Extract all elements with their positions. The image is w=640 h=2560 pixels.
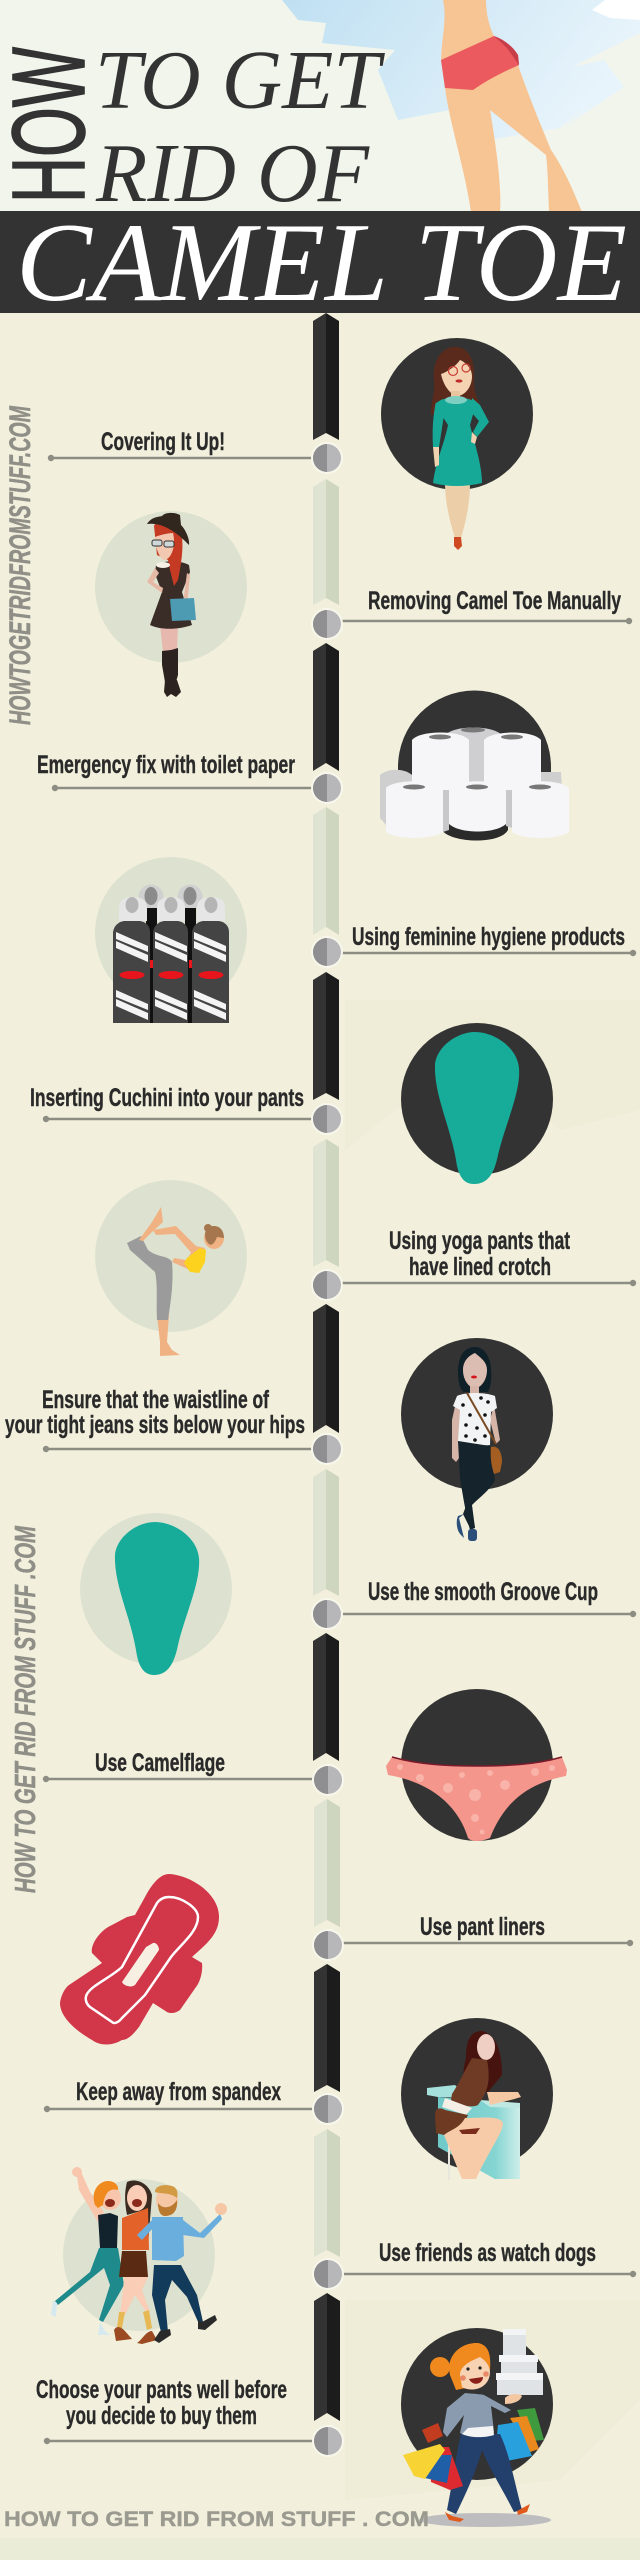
boxes stack [496,2329,543,2395]
friend: middle woman [114,2181,157,2344]
header panel [0,0,640,212]
icon: red sanitary pad [60,1874,219,2044]
title band: CAMEL TOE: CAMEL TOE [16,201,627,325]
icon: woman in polka-dot shirt [401,1338,553,1541]
icon: toilet paper rolls [380,690,569,841]
labels [5,428,625,2430]
label 5: Inserting Cuchini into your pants [30,1084,304,1112]
bags right [497,2408,544,2461]
head and hair [430,2343,490,2390]
friend: left woman [51,2167,124,2335]
cardigan [443,2393,511,2437]
label 6 [389,1227,570,1281]
label 11: Keep away from spandex [76,2078,281,2106]
can caps [119,884,225,1023]
icon: girl in black dress and hat [95,511,247,697]
footer watermark: HOW TO GET RID FROM STUFF . COM [4,2508,429,2531]
icon: shopper with bags [401,2328,553,2527]
timeline nodes [311,442,344,2457]
label 7: your tight jeans sits below your hips [5,1411,305,1439]
icon: teal groove cup on light circle [80,1513,232,1675]
label 6: have lined crotch [409,1253,551,1281]
icon: yoga pose [95,1180,247,1356]
label 10: Use pant liners [420,1913,545,1941]
title: RID OF: RID OF [95,127,371,220]
icon: woman in teal dress [381,338,533,550]
label 1: Covering It Up! [101,428,225,456]
bags left [403,2423,463,2490]
label 13 [36,2376,287,2430]
icon: pink panty on dark circle [386,1689,567,1841]
can bodies with stripes [113,921,229,1023]
timeline spine [313,313,340,2421]
friend: bearded man [137,2185,227,2343]
icon: teal groove cup on dark circle [401,1023,553,1184]
label 7 [5,1386,305,1439]
label 13: Choose your pants well before [36,2376,287,2404]
watermark: vertical url upper: HOWTOGETRIDFROMSTUFF.COM [4,405,37,725]
illustration: woman torso and legs in red briefs [441,0,582,212]
illustration: blue paint splash [282,0,640,140]
icon: three friends [51,2167,227,2344]
icon: spray cans [95,857,247,1023]
legs [447,2434,522,2514]
label 13: you decide to buy them [66,2402,257,2430]
label 9: Use Camelflage [95,1749,225,1777]
illustration: white splash corner [592,0,640,20]
shadow [419,2513,551,2527]
icon: woman on bar stool [401,2018,553,2180]
watermark: vertical url lower: HOW TO GET RID FROM STUFF .COM [10,1525,42,1893]
label 3: Emergency fix with toilet paper [37,751,295,779]
label 7: Ensure that the waistline of [42,1386,269,1414]
title: TO GET: TO GET [95,34,385,127]
connector lines [43,455,636,2444]
